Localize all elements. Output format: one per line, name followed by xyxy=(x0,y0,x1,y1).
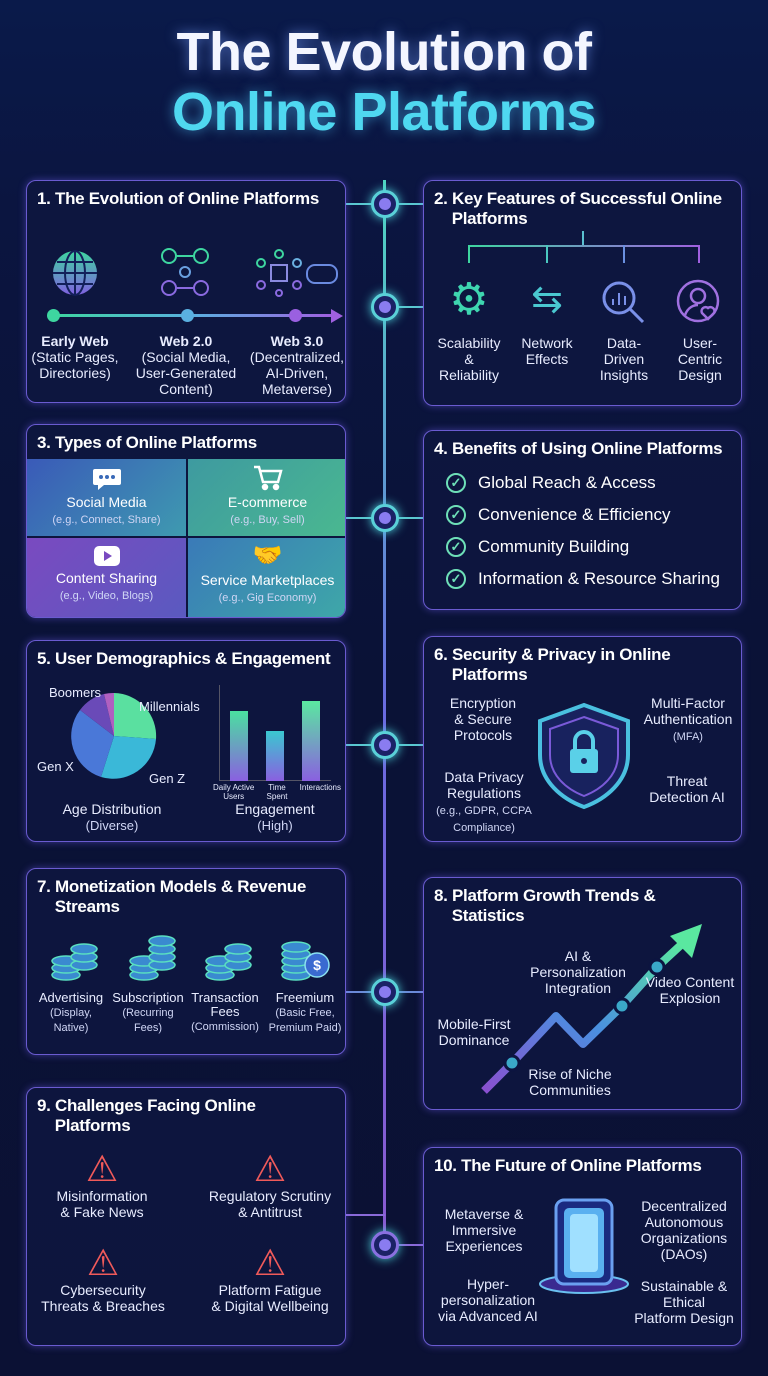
challenge: misinformation: ⚠ xyxy=(86,1148,118,1189)
panel: 4 benefits xyxy=(423,430,742,610)
timeline arrow xyxy=(47,309,343,323)
texts xyxy=(450,695,516,743)
challenge: cybersecurity: Threats & Breaches xyxy=(41,1298,165,1314)
panel: 6 security: Authentication xyxy=(644,711,732,727)
tile: service marketplaces xyxy=(188,538,347,619)
panel: 7 monetization: Premium Paid) xyxy=(269,1022,341,1034)
labels: Advertising xyxy=(39,990,103,1005)
tile: social media: (e.g., Connect, Share) xyxy=(52,514,161,526)
heading: Streams xyxy=(55,897,120,916)
panel: 8 growth: Communities xyxy=(529,1082,611,1098)
checklist: Community Building xyxy=(478,537,629,556)
panel: 7 monetization: (Commission) xyxy=(191,1021,259,1033)
panel: 6 security: Data Privacy xyxy=(444,769,524,785)
panel: 6 security: Threat xyxy=(667,773,707,789)
panel: 10 future: Decentralized xyxy=(641,1198,727,1214)
panel: 2 key features: Data- xyxy=(607,335,641,351)
panel: 10 future: (DAOs) xyxy=(661,1246,707,1262)
icon: arrows: ⇆ xyxy=(531,279,563,321)
bar chart xyxy=(219,685,331,781)
panel: 6 security: Multi-Factor xyxy=(651,695,725,711)
heading xyxy=(37,877,306,916)
label: early web: Directories) xyxy=(39,365,111,381)
checklist: ✓ xyxy=(451,571,461,586)
panel: 2 key features: Design xyxy=(678,367,722,383)
panel: 8 growth: Personalization xyxy=(530,964,626,980)
challenge: regulatory xyxy=(209,1148,332,1220)
panel: 3 types xyxy=(26,424,346,618)
panel: 6 security xyxy=(423,636,742,842)
heading: 8. Platform Growth Trends & xyxy=(434,886,655,905)
tile: content sharing: (e.g., Video, Blogs) xyxy=(60,590,153,602)
label: web 3.0: (Decentralized, xyxy=(250,349,344,365)
heading: 7. Monetization Models & Revenue xyxy=(37,877,306,896)
tile: service marketplaces: (e.g., Gig Economy) xyxy=(219,592,316,604)
checklist: Information & Resource Sharing xyxy=(478,569,720,588)
panel: 5 demographics: Gen X xyxy=(37,759,74,774)
checklist: ✓ xyxy=(451,507,461,522)
label: web 2.0: User-Generated xyxy=(136,365,236,381)
panel: 10 future: Ethical xyxy=(663,1294,705,1310)
label: early web: (Static Pages, xyxy=(31,349,119,365)
tile: service marketplaces: 🤝 xyxy=(253,542,282,569)
panel: 6 security: (MFA) xyxy=(673,731,703,743)
texts: & Secure xyxy=(454,711,512,727)
panel: 8 growth: AI & xyxy=(565,948,591,964)
panel: 5 demographics: Age Distribution xyxy=(63,801,161,817)
panel: 5 demographics: Interactions xyxy=(300,783,341,792)
panel: 5 demographics: Time xyxy=(268,783,286,792)
panel: 5 demographics xyxy=(26,640,346,842)
panel: 5 demographics: Spent xyxy=(267,792,287,801)
checklist: Convenience & Efficiency xyxy=(478,505,670,524)
panel: 2 key features: Effects xyxy=(526,351,568,367)
panel: 7 monetization: (Recurring xyxy=(122,1007,174,1019)
branch arrows xyxy=(468,231,700,263)
tile: e-commerce: (e.g., Buy, Sell) xyxy=(230,514,305,526)
title: Online Platforms xyxy=(172,82,596,142)
challenge: fatigue: ⚠ xyxy=(254,1242,286,1283)
labels xyxy=(437,335,501,383)
panel: 5 demographics: Gen Z xyxy=(149,771,185,786)
label: web 2.0: Web 2.0 xyxy=(160,333,212,349)
heading: 3. Types of Online Platforms xyxy=(37,433,257,452)
tile: content sharing: Content Sharing xyxy=(56,570,157,586)
panel: 9 challenges xyxy=(26,1087,346,1346)
challenge: fatigue xyxy=(211,1242,329,1314)
growth line chart xyxy=(481,924,702,1094)
panel: 7 monetization: Transaction xyxy=(191,990,259,1005)
heading: 10. The Future of Online Platforms xyxy=(434,1156,702,1175)
icon: social network xyxy=(161,248,209,296)
panel: 10 future: Autonomous xyxy=(645,1214,723,1230)
label: web 3.0: Web 3.0 xyxy=(271,333,323,349)
panel: 2 key features: Insights xyxy=(600,367,648,383)
challenge: regulatory: Regulatory Scrutiny xyxy=(209,1188,331,1204)
heading: Platforms xyxy=(452,665,527,684)
challenge: regulatory: ⚠ xyxy=(254,1148,286,1189)
label: early web: Early Web xyxy=(41,333,109,349)
texts: Protocols xyxy=(454,727,512,743)
icon: gear: ⚙ xyxy=(449,275,489,324)
panel: 6 security: (e.g., GDPR, CCPA xyxy=(436,805,532,817)
texts: Metaverse & xyxy=(445,1206,523,1222)
tile: social media: Social Media xyxy=(66,494,147,510)
texts: Experiences xyxy=(445,1238,523,1254)
pie labels: Boomers xyxy=(49,685,101,700)
title: The Evolution of xyxy=(177,22,591,82)
heading: 2. Key Features of Successful Online xyxy=(434,189,722,208)
tile: e-commerce: E-commerce xyxy=(228,494,307,510)
challenge: misinformation: & Fake News xyxy=(60,1204,144,1220)
challenge: regulatory: & Antitrust xyxy=(238,1204,302,1220)
labels: & xyxy=(464,351,474,367)
panel: 5 demographics: Daily Active xyxy=(213,783,254,792)
panel: 2 key features: Driven xyxy=(604,351,644,367)
heading: Platforms xyxy=(452,209,527,228)
labels: Mobile-First xyxy=(437,1016,511,1032)
label: web 2.0 xyxy=(136,333,236,397)
panel: 2 key features: User- xyxy=(683,335,717,351)
heading xyxy=(37,1096,256,1135)
icon: globe xyxy=(53,250,97,296)
checklist: ✓ xyxy=(451,539,461,554)
labels: Scalability xyxy=(437,335,501,351)
challenge: cybersecurity xyxy=(41,1242,165,1314)
heading: 5. User Demographics & Engagement xyxy=(37,649,330,668)
panel: 5 demographics: Millennials xyxy=(139,699,200,714)
panel: 7 monetization: Fees xyxy=(211,1004,239,1019)
panel: 6 security: Compliance) xyxy=(453,822,515,834)
heading xyxy=(434,886,656,925)
panel: 10 future xyxy=(423,1147,742,1346)
challenge: fatigue: & Digital Wellbeing xyxy=(211,1298,329,1314)
icon: shield lock xyxy=(538,702,630,810)
tile: content sharing xyxy=(27,538,186,619)
label: web 3.0 xyxy=(250,333,344,397)
panel: 10 future: Organizations xyxy=(641,1230,727,1246)
panel: 5 demographics: (High) xyxy=(257,818,293,833)
labels: (Display, xyxy=(50,1007,92,1019)
icons: coin stacks xyxy=(51,935,330,981)
checklist: ✓ xyxy=(451,475,461,490)
panel: 8 growth: Video Content xyxy=(646,974,734,990)
panel: 6 security: Regulations xyxy=(447,785,521,801)
labels: Dominance xyxy=(439,1032,509,1048)
labels xyxy=(437,1016,511,1048)
panel: 1 evolution xyxy=(26,180,346,403)
icon: portal xyxy=(539,1198,629,1294)
panel: 6 security: Detection AI xyxy=(649,789,725,805)
panel: 8 growth: Rise of Niche xyxy=(528,1066,612,1082)
panel: 8 growth: Explosion xyxy=(660,990,720,1006)
checklist: Global Reach & Access xyxy=(478,473,656,492)
heading: 9. Challenges Facing Online xyxy=(37,1096,256,1115)
heading: 1. The Evolution of Online Platforms xyxy=(37,189,319,208)
label: early web xyxy=(31,333,119,381)
texts: Immersive xyxy=(452,1222,516,1238)
challenge: fatigue: Platform Fatigue xyxy=(219,1282,321,1298)
panel: 5 demographics: Engagement xyxy=(235,801,315,817)
tile: social media xyxy=(27,459,186,536)
heading: 4. Benefits of Using Online Platforms xyxy=(434,439,722,458)
labels: Native) xyxy=(54,1022,88,1034)
label: web 2.0: (Social Media, xyxy=(142,349,230,365)
panel: 2 key features: Network xyxy=(521,335,573,351)
panel: 8 growth: Integration xyxy=(545,980,611,996)
tile: e-commerce xyxy=(188,459,347,536)
label: web 3.0: AI-Driven, xyxy=(266,365,328,381)
panel: 10 future: Sustainable & xyxy=(641,1278,727,1294)
heading xyxy=(434,189,722,228)
icon: web3 cube + vr xyxy=(256,249,338,297)
heading: Platforms xyxy=(55,1116,130,1135)
texts: Encryption xyxy=(450,695,516,711)
panel: 7 monetization: Subscription xyxy=(112,990,184,1005)
panel: 5 demographics: (Diverse) xyxy=(86,818,138,833)
tile: service marketplaces: Service Marketplaces xyxy=(201,572,334,588)
panel: 2 key features: Centric xyxy=(678,351,722,367)
challenge: cybersecurity: ⚠ xyxy=(87,1242,119,1283)
panel: 7 monetization xyxy=(26,868,346,1055)
icon: user heart xyxy=(676,280,720,322)
texts xyxy=(445,1206,524,1254)
heading: 6. Security & Privacy in Online xyxy=(434,645,670,664)
challenge: misinformation: Misinformation xyxy=(56,1188,148,1204)
panel: 10 future: personalization xyxy=(441,1292,535,1308)
panel: 7 monetization: Freemium xyxy=(276,990,334,1005)
panel: 5 demographics: Users xyxy=(223,792,244,801)
panel: 7 monetization: (Basic Free, xyxy=(275,1007,335,1019)
labels xyxy=(38,990,103,1034)
label: web 3.0: Metaverse) xyxy=(262,381,332,397)
challenge: cybersecurity: Cybersecurity xyxy=(60,1282,146,1298)
panel: 7 monetization: Fees) xyxy=(134,1022,162,1034)
panel: 10 future: via Advanced AI xyxy=(438,1308,538,1324)
panel: 10 future: Hyper- xyxy=(467,1276,509,1292)
panel: 8 growth xyxy=(423,877,742,1110)
label: web 2.0: Content) xyxy=(159,381,213,397)
checklist xyxy=(446,473,720,589)
pie chart xyxy=(71,693,156,779)
panel: 2 key features xyxy=(423,180,742,406)
title xyxy=(166,22,601,142)
labels: Reliability xyxy=(439,367,499,383)
heading xyxy=(434,645,670,684)
icons: coin stacks: $ xyxy=(313,957,321,973)
panel: 10 future: Platform Design xyxy=(634,1310,734,1326)
icon: magnifier chart xyxy=(602,282,644,323)
heading: Statistics xyxy=(452,906,524,925)
challenge: misinformation xyxy=(56,1148,148,1220)
